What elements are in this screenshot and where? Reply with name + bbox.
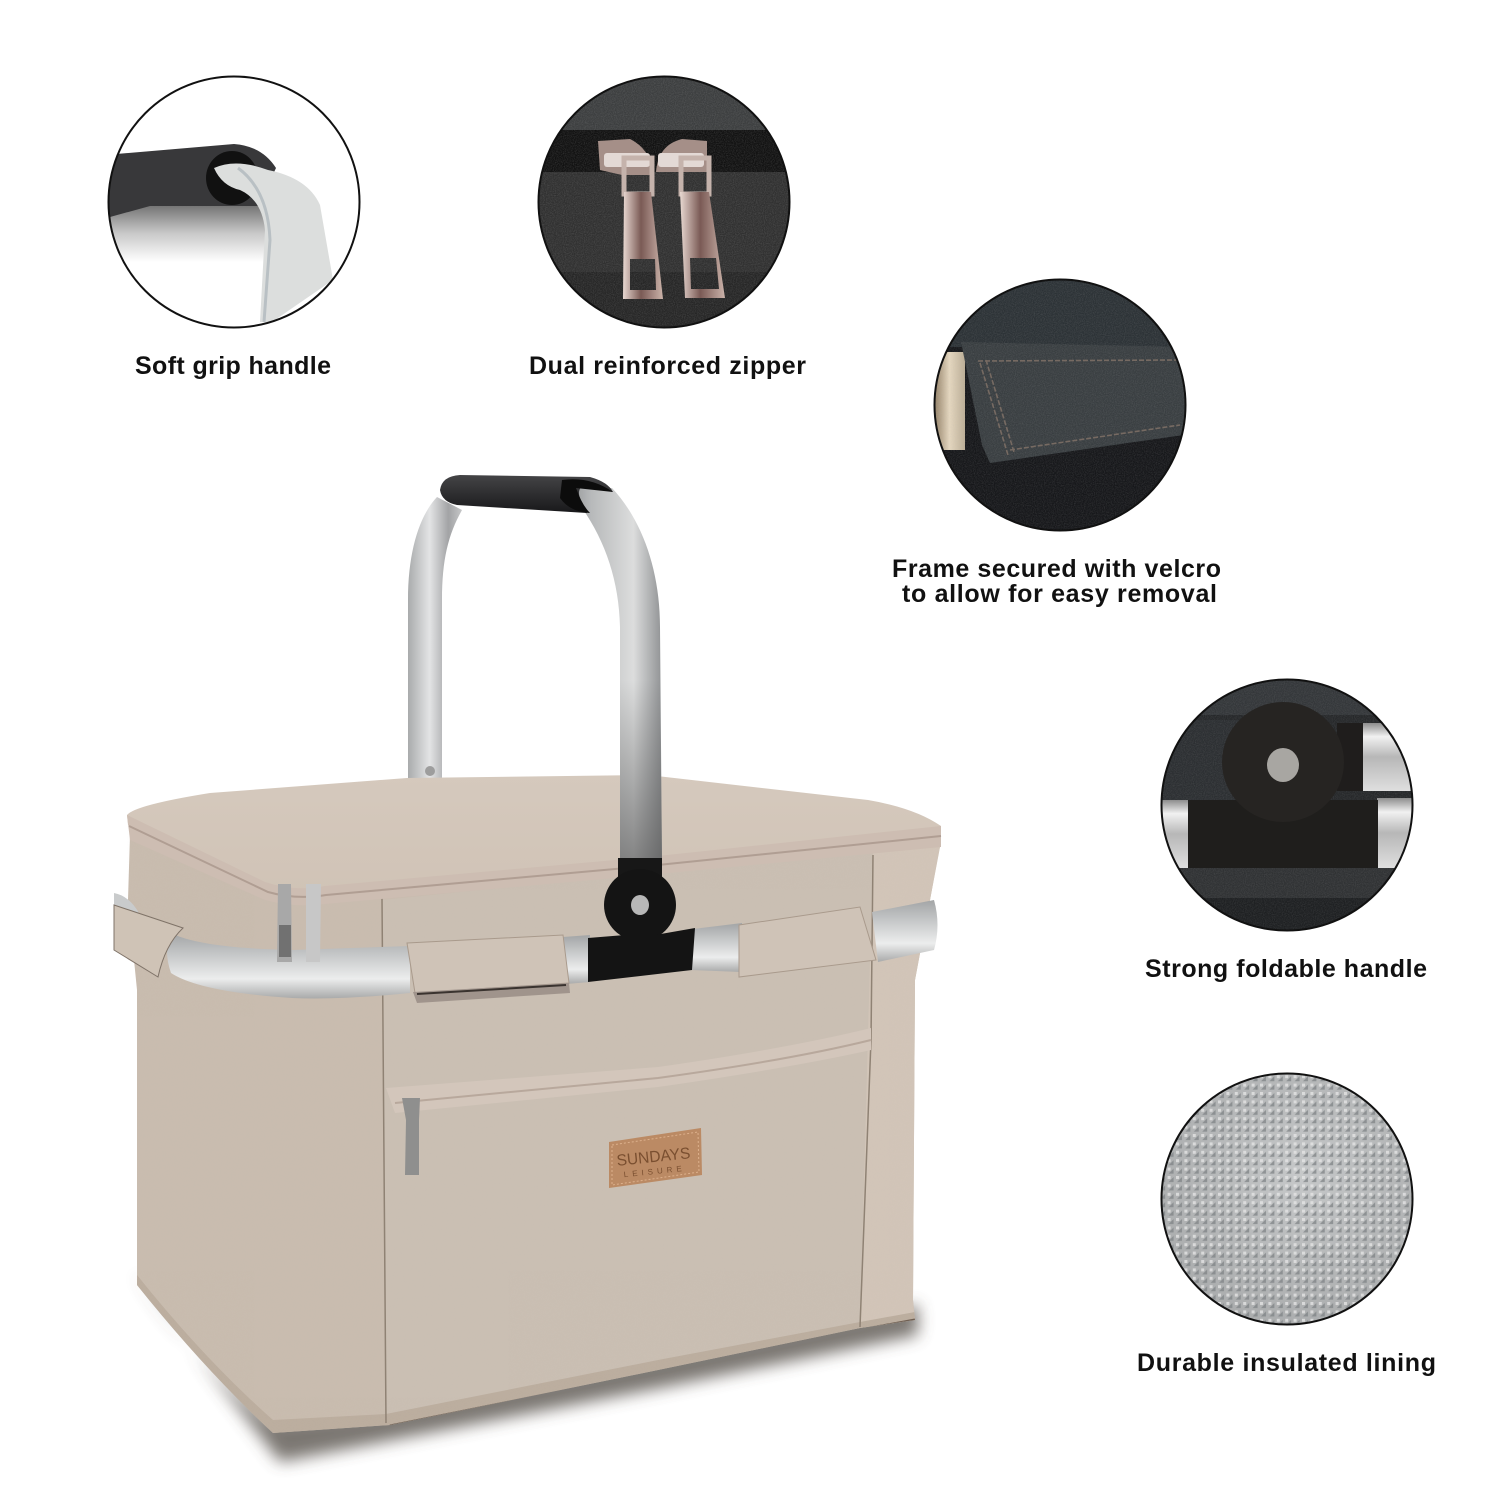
inset circle: dual zipper — [540, 78, 788, 326]
icon: hinge disk — [1222, 702, 1337, 800]
handle hinge — [588, 858, 695, 982]
base edge — [130, 1275, 915, 1440]
front handle arm — [567, 488, 662, 860]
icon: left zipper slider and pull — [598, 139, 663, 299]
label: strong foldable handle: Strong foldable handle — [1145, 955, 1427, 983]
bag body — [128, 835, 941, 1433]
silver rim middle section — [563, 935, 590, 984]
back handle arm — [408, 497, 462, 780]
label: frame secured with velcro — [892, 555, 1221, 608]
icon: silver upper arm — [1362, 723, 1414, 791]
label: frame secured with velcro: Frame secured with velcro — [892, 555, 1221, 583]
brand patch: LEISURE — [623, 1164, 686, 1179]
left velcro tab — [114, 905, 183, 977]
lid — [127, 775, 941, 894]
front pocket — [386, 1028, 871, 1175]
product: picnic cooler basket — [114, 475, 950, 1462]
inset circle: velcro frame — [930, 275, 1190, 535]
centre velcro tab — [407, 935, 569, 993]
right side panel — [860, 840, 945, 1328]
icon: tan metal frame — [934, 352, 965, 450]
ground shadow — [132, 1270, 918, 1462]
fabric seams — [382, 855, 873, 1423]
label: soft grip handle: Soft grip handle — [135, 352, 331, 380]
icon: black hinge bar — [1188, 800, 1378, 868]
brand patch: SUNDAYS — [616, 1145, 691, 1170]
front panel — [382, 850, 873, 1418]
icon: black rubber grip — [105, 144, 276, 217]
icon: translucent handle strip — [214, 163, 333, 322]
icon: velcro strap — [961, 342, 1190, 463]
zipper pulls — [277, 884, 321, 962]
silver rim back left end — [114, 893, 140, 915]
label: durable insulated lining: Durable insulated lining — [1137, 1349, 1436, 1377]
silver rim right section — [872, 900, 938, 962]
silver rim right of hinge — [690, 923, 742, 972]
right velcro tab — [739, 907, 876, 977]
lid zipper tape — [127, 815, 941, 905]
inset circle: insulated lining — [1162, 1074, 1412, 1324]
icon: right zipper slider and pull — [656, 139, 725, 298]
pocket zipper pull — [402, 1098, 420, 1175]
inset circle: soft grip handle — [110, 144, 332, 322]
grip end ring — [560, 479, 613, 513]
label: dual reinforced zipper: Dual reinforced zipper — [529, 352, 806, 380]
label: frame secured with velcro: to allow for easy removal — [902, 580, 1217, 608]
inset circle: foldable handle — [1162, 680, 1412, 930]
handle grip — [440, 475, 613, 513]
icon: silver lower rails — [1162, 800, 1188, 868]
silver rim left section — [167, 933, 410, 998]
brand patch — [609, 1128, 702, 1188]
icon: hinge bolt — [1267, 748, 1299, 782]
